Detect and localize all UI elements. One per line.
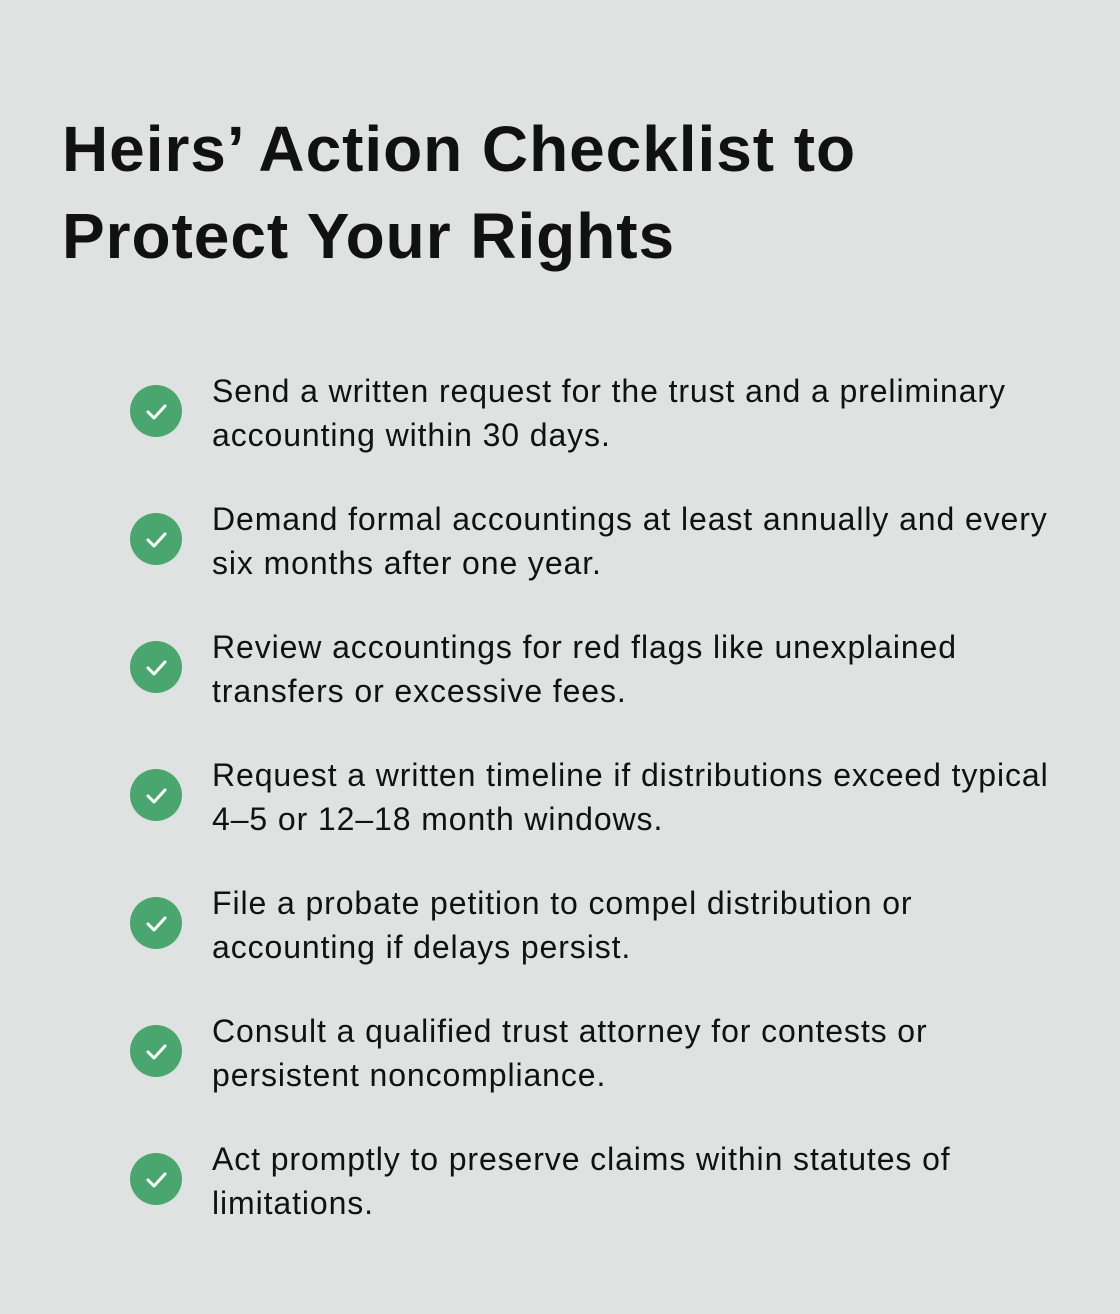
- icon: check: [130, 769, 182, 821]
- text: [212, 1013, 928, 1093]
- text: [212, 1141, 951, 1221]
- text: six months after one year.: [212, 545, 602, 581]
- text: accounting if delays persist.: [212, 929, 631, 965]
- item 4: [130, 757, 1049, 837]
- item 1: [130, 373, 1006, 453]
- text: limitations.: [212, 1185, 374, 1221]
- text: transfers or excessive fees.: [212, 673, 627, 709]
- text: [212, 373, 1006, 453]
- text: accounting within 30 days.: [212, 417, 611, 453]
- checklist: [130, 373, 1049, 1221]
- text: Review accountings for red flags like unexplained: [212, 629, 957, 665]
- text: Send a written request for the trust and a preliminary: [212, 373, 1006, 409]
- icon: check: [130, 897, 182, 949]
- title: [62, 113, 856, 272]
- text: Request a written timeline if distributions exceed typical: [212, 757, 1049, 793]
- item 6: [130, 1013, 928, 1093]
- text: Demand formal accountings at least annually and every: [212, 501, 1048, 537]
- icon: check: [130, 1025, 182, 1077]
- text: [212, 629, 957, 709]
- item 5: [130, 885, 912, 965]
- text: Consult a qualified trust attorney for contests or: [212, 1013, 928, 1049]
- text: [212, 757, 1049, 837]
- text: persistent noncompliance.: [212, 1057, 606, 1093]
- icon: check: [130, 641, 182, 693]
- text: Act promptly to preserve claims within statutes of: [212, 1141, 951, 1177]
- title: Heirs’ Action Checklist to: [62, 113, 856, 185]
- title: Protect Your Rights: [62, 200, 675, 272]
- icon: check: [130, 1153, 182, 1205]
- text: [212, 885, 912, 965]
- text: File a probate petition to compel distribution or: [212, 885, 912, 921]
- icon: check: [130, 513, 182, 565]
- text: [212, 501, 1048, 581]
- item 7: [130, 1141, 951, 1221]
- text: 4–5 or 12–18 month windows.: [212, 801, 663, 837]
- icon: check: [130, 385, 182, 437]
- item 2: [130, 501, 1048, 581]
- item 3: [130, 629, 957, 709]
